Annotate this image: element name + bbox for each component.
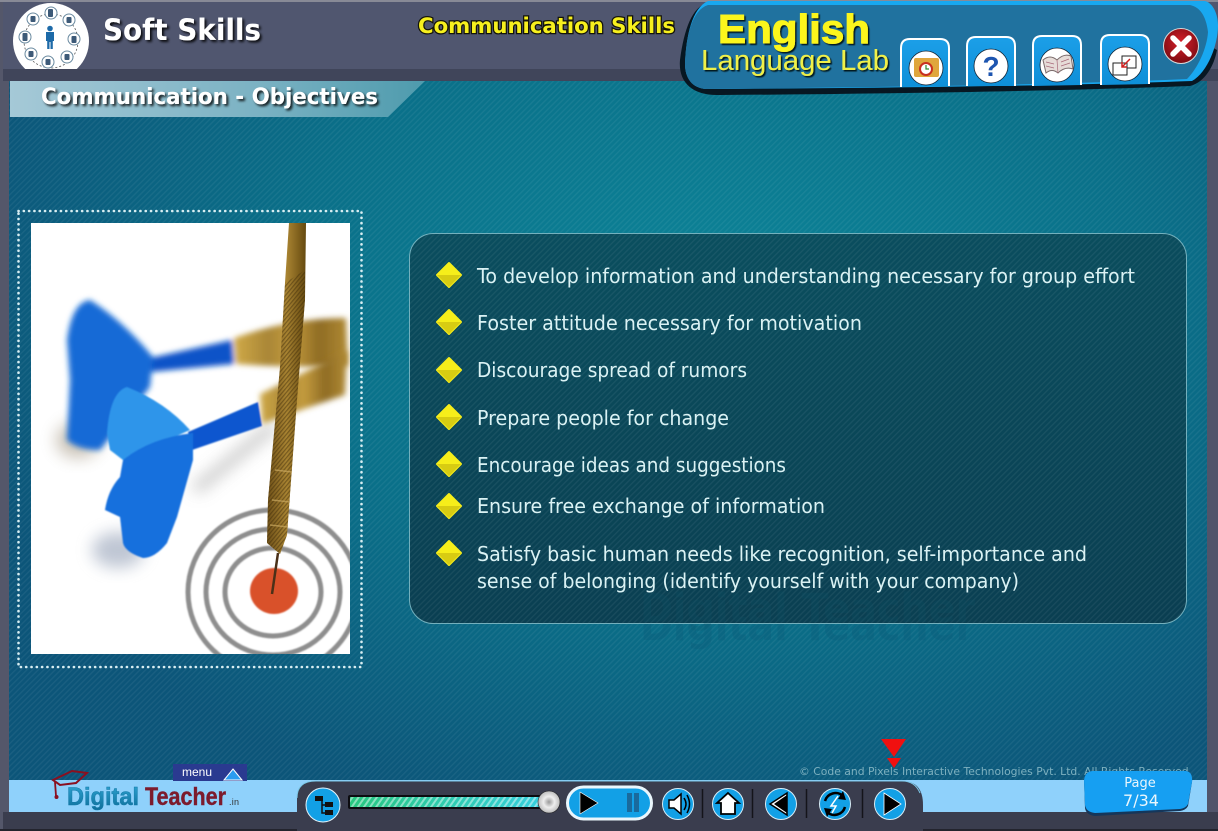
- menu tab: [173, 764, 247, 781]
- item 7: sense of belonging (identify yourself with your company): [477, 569, 1019, 593]
- progress bar: [348, 791, 560, 813]
- logo: digital teacher: .in: [229, 797, 239, 807]
- heading: communication skills: Communication Skills: [418, 14, 675, 38]
- item 6: Ensure free exchange of information: [477, 494, 825, 518]
- button: contents tree: [306, 788, 340, 822]
- section title strip: [10, 81, 425, 117]
- button: speaker: [662, 788, 694, 820]
- photo: darts hitting target: [31, 223, 358, 674]
- shadows: [56, 422, 100, 458]
- text: english: English: [718, 6, 870, 52]
- control bar: [297, 781, 923, 831]
- item 7: [437, 541, 1087, 593]
- footer band: [0, 780, 1218, 831]
- icon: close button: [1164, 28, 1198, 64]
- copyright: © Code and Pixels Interactive Technologies Pvt. Ltd. All Rights Reserved.: [799, 765, 1192, 778]
- arrow: red marker: [881, 739, 906, 768]
- watermark over panel: Digital Teacher: [640, 586, 975, 632]
- panel: objectives list: [410, 234, 1186, 632]
- icon: soft skills logo: [13, 3, 89, 69]
- image panel: dotted frame: [18, 211, 362, 667]
- item 7: Satisfy basic human needs like recognition, self-importance and: [477, 542, 1087, 566]
- bullseye: [250, 568, 298, 614]
- upright dart: [267, 223, 306, 594]
- tab: resize: [1101, 35, 1149, 85]
- english language lab panel: [680, 1, 1218, 95]
- button: home: [712, 788, 744, 820]
- heading: soft skills: Soft Skills: [103, 13, 261, 47]
- logo: digital teacher: Teacher: [145, 783, 226, 811]
- front dart: [105, 350, 347, 558]
- rings: [184, 506, 350, 654]
- button: refresh: [820, 788, 850, 820]
- logo: digital teacher: Digital: [67, 783, 139, 811]
- page counter: Page: [1124, 776, 1156, 791]
- item 2: Foster attitude necessary for motivation: [477, 311, 862, 335]
- button: next: [874, 788, 906, 820]
- page counter: [1084, 771, 1192, 816]
- tab: help: ?: [982, 51, 1000, 82]
- rear dart: [67, 300, 348, 450]
- button: back: [766, 788, 796, 820]
- section title strip: Communication - Objectives: [41, 85, 378, 110]
- tab: help: [967, 37, 1015, 86]
- logo: digital teacher: [53, 771, 239, 811]
- tab: book: [1033, 36, 1081, 86]
- header bar: [0, 0, 1218, 81]
- watermark: Digital Teacher: [640, 600, 975, 651]
- menu tab: menu: [182, 765, 212, 779]
- tab: folder history: [901, 39, 949, 87]
- page counter: 7/34: [1123, 791, 1159, 810]
- text: language lab: Language Lab: [701, 45, 889, 77]
- item 4: Prepare people for change: [477, 406, 729, 430]
- dividers: [702, 789, 862, 818]
- item 3: Discourage spread of rumors: [477, 358, 747, 382]
- item 5: Encourage ideas and suggestions: [477, 453, 786, 477]
- play and pause control: [568, 787, 652, 819]
- item 1: To develop information and understanding necessary for group effort: [476, 264, 1135, 288]
